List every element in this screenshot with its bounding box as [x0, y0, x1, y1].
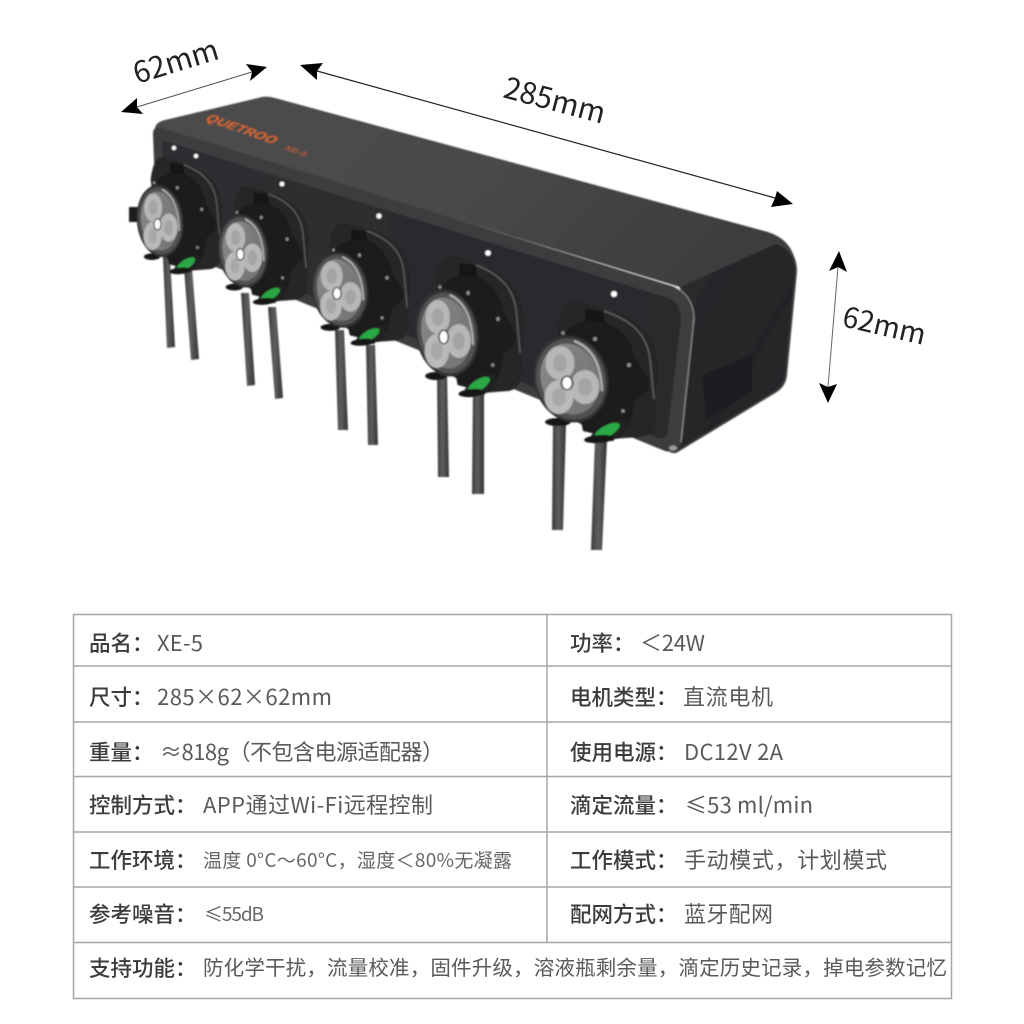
device right side face: [672, 243, 796, 452]
row: working mode: 工作模式：: [570, 844, 678, 875]
dimension: length 285mm arrow: [300, 63, 793, 207]
row: environment: [89, 844, 512, 875]
row: flow rate: 滴定流量：: [570, 789, 678, 820]
dimension label: height 62mm: 62mm: [839, 295, 930, 354]
row: power supply: 使用电源：: [570, 736, 678, 767]
row: control: 控制方式：: [89, 789, 197, 820]
row: noise: ≤55dB: [204, 900, 264, 927]
row: features: 防化学干扰，流量校准，固件升级，溶液瓶剩余量，滴定历史记录，掉电参数记忆: [203, 951, 947, 981]
row: working mode: [570, 843, 887, 875]
row: flow rate: ≤53 ml/min: [685, 788, 813, 820]
row: product name: 品名：: [89, 627, 154, 658]
product: dosing pump device: [129, 97, 796, 550]
dimension: depth 62mm arrow: [121, 64, 267, 114]
indicator lights: [172, 146, 617, 297]
logo: XE-5: [282, 145, 310, 158]
row: noise: 参考噪音：: [89, 898, 197, 929]
row: flow rate: [570, 788, 813, 820]
row: working mode: 手动模式，计划模式: [684, 843, 887, 875]
pump head 5: [523, 302, 658, 444]
device front inner panel: [162, 140, 681, 438]
row: power: ＜24W: [640, 626, 705, 658]
row: environment: 工作环境：: [89, 844, 197, 875]
row: noise: [89, 898, 264, 929]
row: network: 配网方式：: [570, 898, 678, 929]
dimension: height 62mm arrow: [819, 251, 847, 403]
row: control: APP通过Wi-Fi远程控制: [203, 788, 433, 820]
row: weight: 重量：: [89, 736, 154, 767]
row: product name: XE-5: [157, 626, 203, 658]
row: motor type: 电机类型：: [570, 681, 678, 712]
logo: QUETROO: [202, 112, 283, 146]
row: product name: [89, 626, 203, 658]
row: power: [570, 626, 705, 658]
row: network: 蓝牙配网: [684, 897, 773, 929]
row: power supply: [570, 735, 784, 767]
table grid: [73, 614, 952, 998]
row: network: [570, 897, 773, 929]
row: weight: ≈818g（不包含电源适配器）: [160, 735, 444, 767]
tubes: [163, 257, 607, 550]
row: motor type: 直流电机: [683, 680, 773, 712]
logo: [202, 112, 310, 158]
dimension label: 285mm: 285mm: [500, 65, 611, 133]
row: size: 285×62×62mm: [157, 680, 332, 712]
corner screw: [669, 446, 677, 450]
pump head 1: [129, 157, 223, 275]
row: control: [89, 788, 433, 820]
corner highlight: [676, 288, 694, 442]
row: power supply: DC12V 2A: [684, 735, 784, 767]
row: features: 支持功能：: [89, 952, 197, 983]
row: size: 尺寸：: [89, 681, 154, 712]
row: motor type: [570, 680, 773, 712]
pump head 4: [406, 256, 524, 398]
pump head 2: [211, 186, 309, 306]
row: environment: 温度 0°C～60°C，湿度＜80%无凝露: [203, 846, 512, 873]
device front face: [153, 127, 693, 452]
device top face: [155, 97, 795, 288]
row: power: 功率：: [570, 627, 635, 658]
pump head 3: [304, 223, 410, 347]
right side interior shape: [702, 355, 752, 420]
dimension label: 62mm: 62mm: [127, 27, 223, 93]
specification table: [73, 614, 952, 998]
